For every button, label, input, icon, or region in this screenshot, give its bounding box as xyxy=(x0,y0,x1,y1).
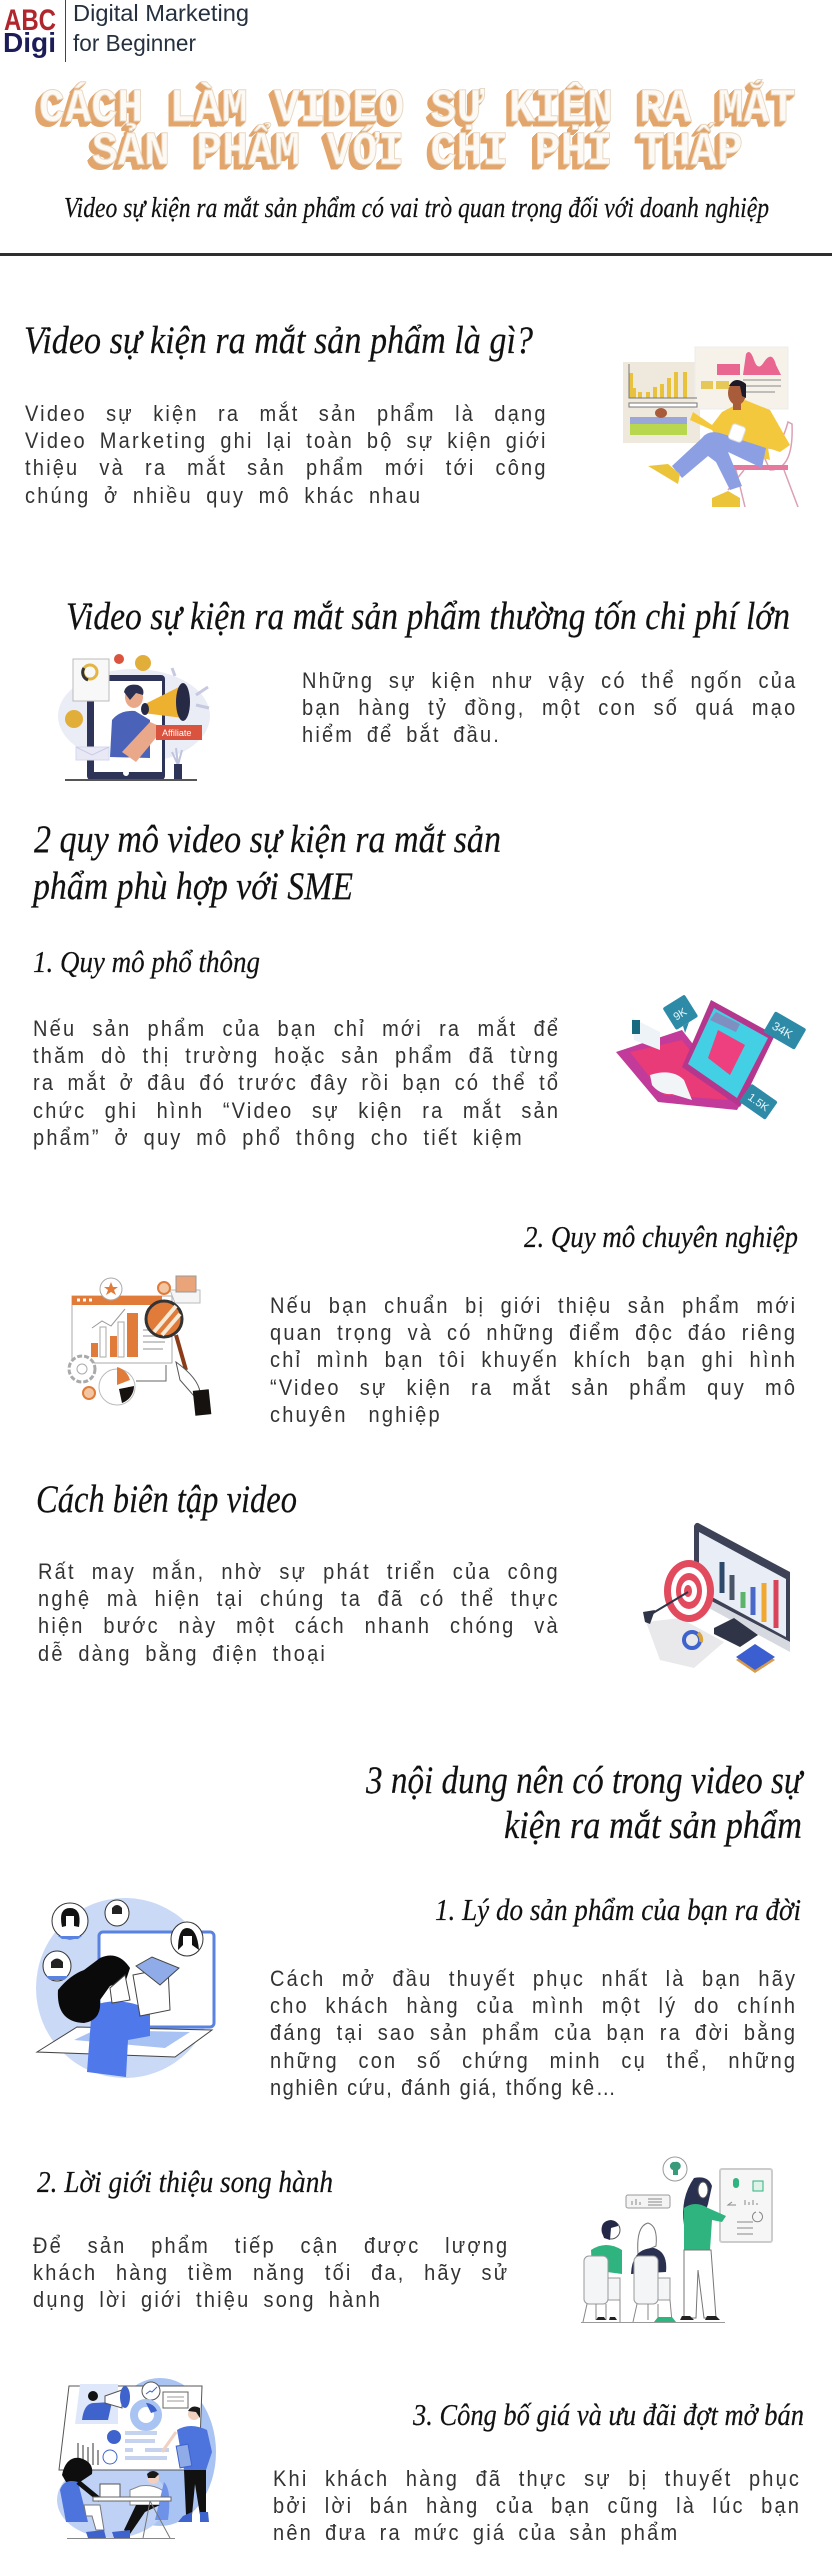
illustration: phone with megaphone xyxy=(58,654,210,781)
subheading: standard scale: 1. Quy mô phổ thông xyxy=(33,944,260,979)
heading: three content items xyxy=(365,1759,804,1847)
text block: reason: đáng tại sao sản phẩm của bạn ra đời bằng xyxy=(270,2020,797,2045)
illustration: laptop with social bubbles: 34K xyxy=(770,1019,795,1042)
text block: professional scale: “Video sự kiện ra mắt sản phẩm quy mô xyxy=(270,1375,797,1400)
text block: reason: Cách mở đầu thuyết phục nhất là bạn hãy xyxy=(270,1966,797,1991)
illustration: man with charts on chair xyxy=(623,347,798,507)
text block: price: nên đưa ra mức giá của sản phẩm xyxy=(273,2520,679,2545)
logo: ABC Digi: for Beginner xyxy=(73,30,196,56)
text block: professional scale: chỉ mình bạn tôi khuyến khích bạn ghi hình xyxy=(270,1347,797,1372)
text block: definition: chúng ở nhiều quy mô khác nhau xyxy=(25,483,422,508)
text block: standard scale: phẩm” ở quy mô phổ thông cho tiết kiệm xyxy=(33,1125,524,1150)
text block: high cost: Những sự kiện như vậy có thể ngốn của xyxy=(302,668,797,693)
heading: three content items: kiện ra mắt sản phẩm xyxy=(504,1804,802,1847)
text block: professional scale: chuyên nghiệp xyxy=(270,1402,442,1427)
title xyxy=(39,80,796,179)
text block: parallel introduction: Để sản phẩm tiếp cận được lượng xyxy=(33,2233,509,2258)
text block: price: bởi lời bán hàng của bạn cũng là lúc bạn xyxy=(273,2493,801,2518)
heading: two scales xyxy=(30,818,501,908)
text block: reason: những con số chứng minh cụ thể, những xyxy=(270,2048,797,2073)
illustration: monitor, target and chart xyxy=(643,1523,790,1673)
illustration: woman with envelope and avatars xyxy=(36,1898,214,2078)
text block: reason: nghiên cứu, đánh giá, thống kê… xyxy=(270,2075,617,2100)
illustration: phone with megaphone: Affiliate xyxy=(162,728,191,738)
illustration: presenter with seated audience xyxy=(581,2157,772,2323)
text block: definition: Video sự kiện ra mắt sản phẩm là dạng xyxy=(25,401,548,426)
text block: professional scale: quan trọng và có những điểm độc đáo riêng xyxy=(270,1320,797,1345)
text block: editing: hiện bước này một cách nhanh chóng và xyxy=(38,1613,560,1638)
logo: ABC Digi: Digi xyxy=(3,27,56,58)
text block: standard scale: Nếu sản phẩm của bạn chỉ mới ra mắt để xyxy=(33,1016,560,1041)
illustration: team meeting with presentation board xyxy=(57,2378,216,2539)
illustration: laptop with social bubbles xyxy=(616,994,806,1120)
text block: editing: Rất may mắn, nhờ sự phát triển của công xyxy=(38,1559,560,1584)
text block: editing: dễ dàng bằng điện thoại xyxy=(38,1641,327,1666)
heading: two scales: phẩm phù hợp với SME xyxy=(30,865,353,908)
text block: price xyxy=(273,2466,801,2545)
header rule xyxy=(0,253,832,256)
illustration: laptop with social bubbles: 9K xyxy=(671,1006,690,1023)
text block: professional scale: Nếu bạn chuẩn bị giới thiệu sản phẩm mới xyxy=(270,1293,797,1318)
heading: what is product launch video: Video sự kiện ra mắt sản phẩm là gì? xyxy=(24,319,533,362)
text block: definition: Video Marketing ghi lại toàn bộ sự kiện giới xyxy=(25,428,548,453)
heading: how to edit video: Cách biên tập video xyxy=(36,1478,297,1521)
text block: standard scale: chức ghi hình “Video sự kiện ra mắt sản xyxy=(33,1098,560,1123)
illustration: analytics window with magnifier xyxy=(69,1276,211,1416)
subheading: parallel introduction: 2. Lời giới thiệu song hành xyxy=(37,2164,333,2199)
logo: ABC Digi xyxy=(3,0,249,62)
text block: high cost: hiểm để bắt đầu. xyxy=(302,722,501,747)
text block: standard scale: thăm dò thị trường hoặc sản phẩm đã từng xyxy=(33,1043,560,1068)
text block: editing xyxy=(38,1559,560,1666)
illustration: laptop with social bubbles: 1.5K xyxy=(745,1091,771,1115)
text block: definition xyxy=(25,401,548,508)
text block: parallel introduction: dụng lời giới thiệu song hành xyxy=(33,2287,382,2312)
text block: standard scale: ra mắt ở đâu đó trước đây rồi bạn có thể tổ xyxy=(33,1070,560,1095)
text block: high cost xyxy=(302,668,797,747)
text block: reason xyxy=(270,1966,797,2100)
title: SẢN PHẨM VỚI CHI PHÍ THẤP xyxy=(92,123,743,179)
logo: ABC Digi: Digital Marketing xyxy=(73,0,249,26)
text block: standard scale xyxy=(33,1016,560,1150)
text block: price: Khi khách hàng đã thực sự bị thuyết phục xyxy=(273,2466,801,2491)
text block: parallel introduction xyxy=(33,2233,509,2312)
logo: ABC Digi: ABC xyxy=(4,4,56,37)
heading: two scales: 2 quy mô video sự kiện ra mắt sản xyxy=(34,818,501,861)
text block: high cost: bạn hàng tỷ đồng, một con số quá mạo xyxy=(302,695,797,720)
text block: definition: thiệu và ra mắt sản phẩm mới tới công xyxy=(25,455,548,480)
text block: parallel introduction: khách hàng tiềm năng tối đa, hãy sử xyxy=(33,2260,509,2285)
text block: reason: cho khách hàng của mình một lý do chính xyxy=(270,1993,797,2018)
text block: professional scale xyxy=(270,1293,797,1427)
subheading: professional scale: 2. Quy mô chuyên nghiệp xyxy=(524,1219,798,1254)
text block: editing: nghệ mà hiện tại chúng ta đã có thể thực xyxy=(38,1586,560,1611)
